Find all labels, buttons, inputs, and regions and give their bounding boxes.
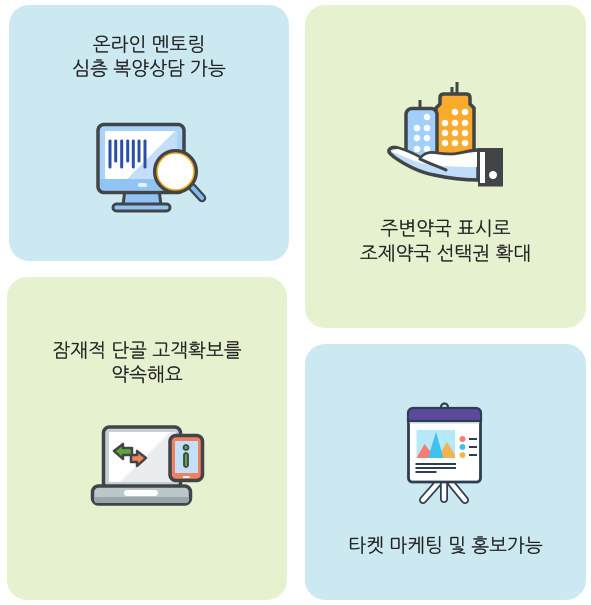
panel: potential customers	[7, 277, 287, 600]
text: online mentoring: 심층 복양상담 가능	[72, 59, 226, 80]
text: potential customers: 약속해요	[111, 365, 183, 386]
panel: online mentoring	[9, 5, 289, 261]
text: potential customers	[52, 341, 242, 386]
panel: target marketing	[305, 344, 586, 600]
text: online mentoring: 온라인 멘토링	[93, 35, 205, 56]
panel: nearby pharmacy	[305, 5, 586, 328]
text: potential customers: 잠재적 단골 고객확보를	[52, 341, 242, 362]
text: target marketing: 타켓 마케팅 및 홍보가능	[348, 536, 543, 557]
text: online mentoring	[72, 35, 226, 80]
text: nearby pharmacy: 조제약국 선택권 확대	[360, 244, 531, 265]
text: nearby pharmacy	[360, 219, 531, 265]
text: nearby pharmacy: 주변약국 표시로	[380, 219, 511, 240]
